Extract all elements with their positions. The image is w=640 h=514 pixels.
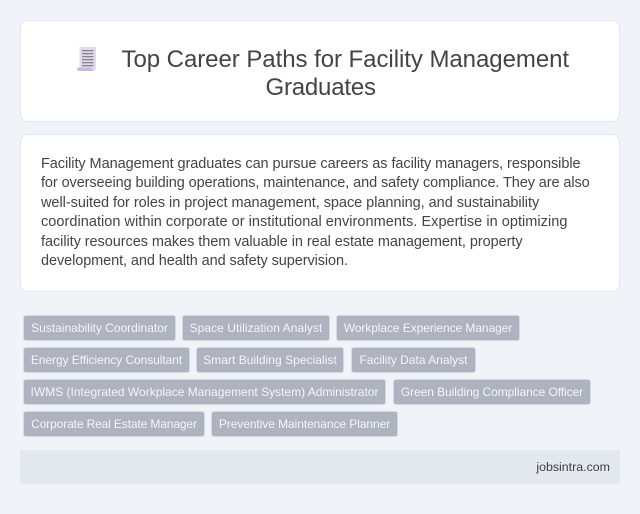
tag [23,379,386,405]
tag: Facility Data Analyst [359,353,468,367]
tag: Workplace Experience Manager [344,321,512,335]
description line 3: well-suited for roles in project management, space planning, and sustainability [41,195,539,211]
tag: Smart Building Specialist [203,353,337,367]
tag: IWMS (Integrated Workplace Management System) Administrator [31,385,378,399]
footer bar [20,450,620,484]
tag [196,347,344,373]
tag: Corporate Real Estate Manager [31,417,197,431]
tag: Green Building Compliance Officer [401,385,583,399]
tag: Space Utilization Analyst [190,321,322,335]
tag [351,347,476,373]
tag: Sustainability Coordinator [31,321,168,335]
tag [23,315,176,341]
tag [23,347,190,373]
tag [393,379,591,405]
footer source: jobsintra.com [536,460,610,474]
description line 4: coordination within corporate or institutional environments. Expertise in optimizing [41,214,567,230]
tag [182,315,330,341]
tag: Energy Efficiency Consultant [31,353,182,367]
title line 2: Graduates [266,74,376,101]
tag [211,411,398,437]
title line 1: Top Career Paths for Facility Management [122,46,569,73]
tag [23,411,205,437]
panel: title header [20,20,620,122]
description line 1: Facility Management graduates can pursue careers as facility managers, responsible [41,156,580,172]
description line 6: development, and health and safety supervision. [41,253,348,269]
description line 5: facility resources makes them valuable in real estate management, property [41,234,523,250]
panel: description [20,134,620,292]
tag: Preventive Maintenance Planner [219,417,390,431]
tag [336,315,520,341]
icon: document scroll [77,47,96,71]
description line 2: for overseeing building operations, maintenance, and safety compliance. They are also [41,175,590,191]
